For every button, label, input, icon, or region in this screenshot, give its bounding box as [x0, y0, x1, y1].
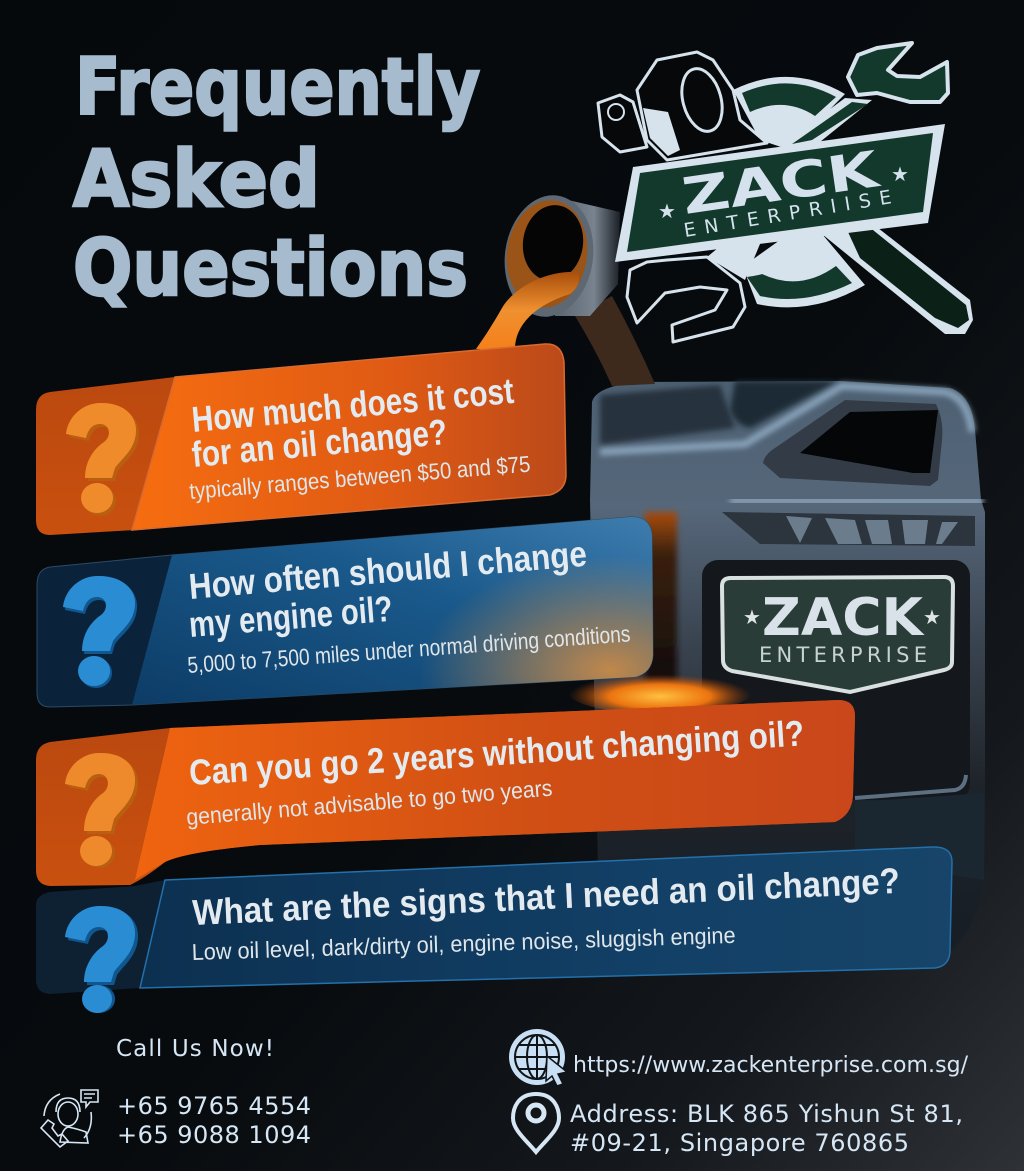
- jug band: [730, 500, 983, 502]
- spout tube: [555, 197, 620, 316]
- spout rim: [497, 189, 601, 323]
- card body: [37, 517, 653, 707]
- answer: generally not advisable to go two years: [185, 775, 553, 830]
- question mark icon: [66, 403, 139, 516]
- phone numbers: +65 9765 4554: [117, 1092, 311, 1120]
- faq card 2: my engine oil?: [187, 588, 394, 645]
- question mark icon: [63, 576, 137, 688]
- jug lower ledge: [855, 775, 966, 798]
- icon: location pin: [513, 1094, 559, 1152]
- logo ring bottom: [745, 228, 865, 307]
- jug shoulder shading: [600, 385, 735, 445]
- answer: Low oil level, dark/dirty oil, engine noise, sluggish engine: [191, 922, 736, 965]
- logo text: ★: [891, 164, 909, 186]
- logo: [598, 43, 973, 342]
- question mark icon: [65, 753, 138, 868]
- icon: globe with cursor: [509, 1029, 567, 1086]
- question: Can you go 2 years without changing oil?: [188, 712, 805, 793]
- phone numbers: [117, 1092, 311, 1149]
- logo ring top: [733, 77, 845, 150]
- address: #09-21, Singapore 760865: [570, 1129, 909, 1157]
- logo text: ★: [658, 201, 676, 223]
- title: Asked: [73, 135, 320, 225]
- logo text: [658, 140, 909, 242]
- faq card 2: [37, 517, 653, 707]
- jug handle opening: [763, 400, 942, 486]
- question mark icon: [65, 906, 138, 1013]
- oil stream: [476, 272, 579, 349]
- website: https://www.zackenterprise.com.sg/: [573, 1053, 969, 1078]
- logo banner: [615, 124, 945, 262]
- wrench left: [598, 52, 973, 334]
- pool of oil on jug: [568, 670, 752, 714]
- title: Frequently: [75, 43, 480, 133]
- address: [570, 1100, 963, 1157]
- question: What are the signs that I need an oil change?: [192, 860, 901, 933]
- jug label text: ★: [923, 607, 941, 629]
- jug handle highlight: [600, 386, 972, 452]
- call us heading: Call Us Now!: [116, 1036, 274, 1062]
- jug ribs: [722, 512, 975, 546]
- phone numbers: +65 9088 1094: [117, 1121, 311, 1149]
- card body: [36, 700, 855, 886]
- glow column beside card 2: [645, 512, 677, 682]
- logo text: ZACK: [678, 140, 885, 226]
- jug label badge: [722, 577, 953, 692]
- faq card 4: [36, 847, 952, 1013]
- question: How much does it cost: [190, 370, 515, 440]
- oil jug: [590, 381, 985, 960]
- jug body: [590, 381, 985, 960]
- icon: phone support agent: [41, 1090, 98, 1147]
- jug label text: [743, 588, 941, 667]
- faq card 1: for an oil change?: [190, 411, 449, 475]
- answer: 5,000 to 7,500 miles under normal driving conditions: [186, 620, 631, 678]
- answer: typically ranges between $50 and $75: [188, 451, 531, 504]
- jug label text: ★: [743, 607, 761, 629]
- address: Address: BLK 865 Yishun St 81,: [570, 1100, 963, 1128]
- jug label panel: [702, 560, 970, 800]
- spout neck: [575, 296, 655, 386]
- jug label text: ZACK: [762, 588, 925, 648]
- spout: [476, 189, 655, 386]
- faq card 3: [36, 700, 855, 886]
- card body: [36, 847, 952, 994]
- jug label text: ENTERPRISE: [759, 643, 927, 667]
- title: [73, 43, 480, 314]
- logo text: ENTERPRIISE: [682, 186, 893, 242]
- faq card 1: [36, 344, 566, 535]
- card body: [36, 344, 566, 535]
- title: Questions: [73, 224, 468, 314]
- question: How often should I change: [187, 533, 588, 607]
- wrench right: [627, 43, 948, 342]
